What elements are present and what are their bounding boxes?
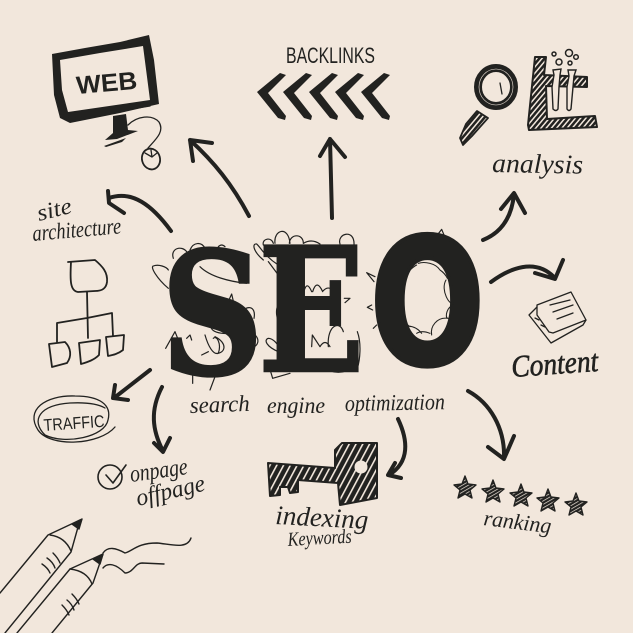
arrow: to web	[190, 140, 249, 216]
arrow: to content	[491, 260, 563, 282]
icon: five rating stars	[454, 476, 587, 515]
label: indexing: indexing	[275, 500, 369, 535]
label: WEB: WEB	[75, 67, 138, 100]
icon: backlink chevrons	[257, 73, 390, 120]
title: SEO: E	[258, 210, 365, 412]
title: SEO: O	[370, 202, 485, 405]
title: SEO	[161, 202, 485, 414]
label: search engine optimization	[189, 389, 445, 418]
arrow: to backlinks	[320, 139, 345, 218]
label: site architecture: architecture	[31, 213, 122, 246]
icon: site architecture tree	[49, 260, 124, 367]
icon: web monitor	[52, 35, 162, 171]
icon: pencils with scribbles	[0, 519, 191, 633]
icon: key	[268, 443, 377, 505]
arrow: to indexing	[388, 419, 405, 478]
label: site architecture: site	[34, 193, 74, 226]
label: ranking: ranking	[482, 505, 553, 538]
label: keywords: Keywords	[286, 526, 352, 551]
label: search engine optimization: optimization	[345, 389, 445, 416]
title: SEO: S	[161, 214, 264, 414]
label: traffic: TRAFFIC	[43, 412, 105, 435]
icon: check mark	[98, 465, 126, 489]
label: site architecture	[31, 193, 122, 246]
arrow: to site architecture	[108, 191, 171, 231]
arrow: to ranking	[468, 391, 514, 459]
label: search engine optimization: search	[189, 391, 250, 418]
label: search engine optimization: engine	[267, 393, 325, 418]
badge: traffic	[34, 396, 115, 442]
icon: content pages	[529, 292, 586, 343]
label: offpage: offpage	[134, 471, 208, 512]
scribbles behind letters	[152, 229, 444, 390]
icon: magnifying glass	[460, 68, 514, 145]
label: analysis: analysis	[492, 148, 583, 180]
icon: lab stand with test tubes	[528, 50, 597, 130]
arrow: to traffic	[113, 370, 150, 400]
scribbles inside O	[398, 262, 454, 335]
label: content: Content	[510, 343, 600, 384]
arrow: to onpage	[154, 387, 170, 452]
label: onpage: onpage	[128, 454, 190, 488]
arrow: to analysis	[483, 193, 525, 240]
heading: backlinks: BACKLINKS	[286, 43, 375, 68]
